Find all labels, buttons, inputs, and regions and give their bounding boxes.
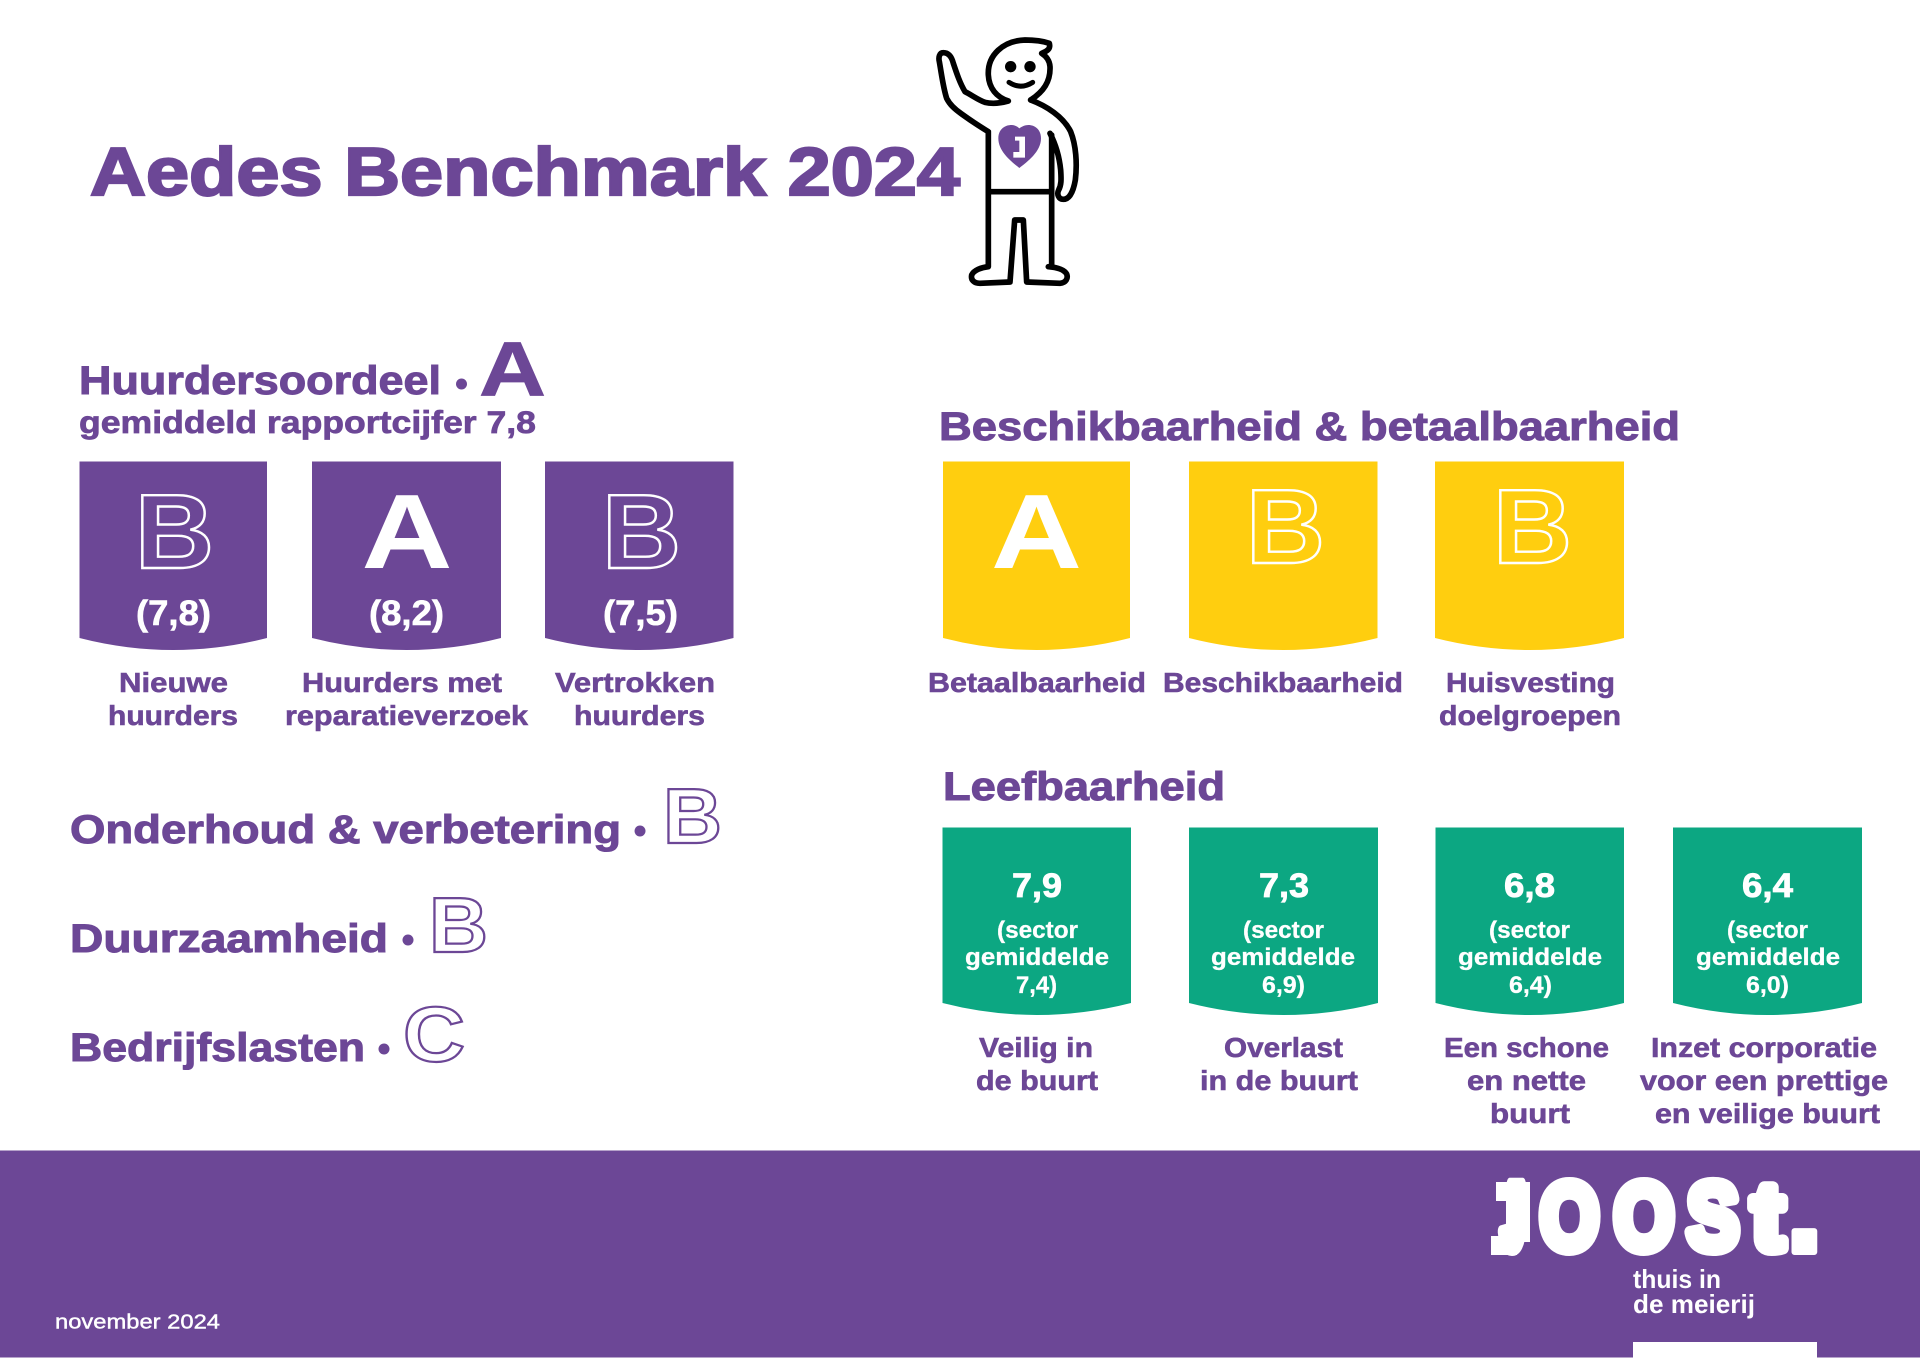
card: Een schone en nette buurt: Een schone bbox=[1444, 1032, 1609, 1063]
card: Beschikbaarheid: B bbox=[1246, 468, 1325, 586]
card: Veilig in de buurt: gemiddelde bbox=[965, 944, 1109, 971]
heading: Huurdersoordeel: A bbox=[479, 326, 546, 412]
card: Veilig in de buurt: 7,4) bbox=[1016, 972, 1057, 999]
card: Nieuwe huurders: Nieuwe bbox=[119, 667, 228, 698]
logo: JOOSt. bbox=[1491, 1125, 1824, 1282]
title: Aedes Benchmark 2024 bbox=[90, 134, 960, 210]
card: Veilig in de buurt bbox=[942, 828, 1131, 1096]
logo: JOOSt.: O bbox=[1540, 1164, 1599, 1270]
card: Nieuwe huurders: huurders bbox=[108, 700, 238, 731]
logo tagline: de meierij bbox=[1633, 1289, 1755, 1319]
card: Een schone en nette buurt: 6,4) bbox=[1509, 972, 1552, 999]
card: Vertrokken huurders: huurders bbox=[574, 700, 705, 731]
card: Veilig in de buurt: de buurt bbox=[976, 1065, 1098, 1096]
card: Veilig in de buurt: 7,9 bbox=[1012, 867, 1062, 905]
heading: Huurdersoordeel: Huurdersoordeel bbox=[79, 359, 441, 403]
card: Een schone en nette buurt: 6,8 bbox=[1504, 867, 1555, 905]
card: Een schone en nette buurt: gemiddelde bbox=[1458, 944, 1602, 971]
logo: JOOSt.: t bbox=[1752, 1164, 1784, 1270]
card: Een schone en nette buurt bbox=[1436, 828, 1624, 1129]
card: Inzet corporatie voor een prettige en veilige buurt: voor een prettige bbox=[1640, 1065, 1888, 1096]
logo: JOOSt.: O bbox=[1614, 1164, 1674, 1270]
card: Overlast in de buurt: gemiddelde bbox=[1211, 944, 1355, 971]
card: Nieuwe huurders: B bbox=[135, 473, 214, 591]
card: Inzet corporatie voor een prettige en veilige buurt: (sector bbox=[1727, 917, 1808, 944]
logo: JOOSt.: J bbox=[1500, 1164, 1526, 1270]
heading: Bedrijfslasten: Bedrijfslasten bbox=[70, 1026, 365, 1070]
card: Betaalbaarheid: A bbox=[991, 473, 1082, 591]
card: Inzet corporatie voor een prettige en veilige buurt: en veilige buurt bbox=[1655, 1098, 1880, 1129]
card: Vertrokken huurders: Vertrokken bbox=[555, 667, 715, 698]
card: Huisvesting doelgroepen: B bbox=[1493, 468, 1572, 586]
card: Inzet corporatie voor een prettige en veilige buurt: gemiddelde bbox=[1696, 944, 1840, 971]
card: Huurders met reparatieverzoek: Huurders met bbox=[302, 667, 502, 698]
logo tagline: thuis in bbox=[1633, 1264, 1721, 1294]
card: Huurders met reparatieverzoek: (8,2) bbox=[369, 594, 444, 633]
card: Beschikbaarheid bbox=[1163, 462, 1403, 698]
heading: Onderhoud & verbetering bbox=[70, 772, 722, 860]
card: Een schone en nette buurt: buurt bbox=[1490, 1098, 1570, 1129]
card: Een schone en nette buurt: (sector bbox=[1489, 917, 1570, 944]
card: Betaalbaarheid bbox=[928, 462, 1146, 698]
heading: Onderhoud & verbetering: Onderhoud & verbetering bbox=[70, 808, 621, 852]
card: Overlast in de buurt: Overlast bbox=[1224, 1032, 1343, 1063]
card: Huurders met reparatieverzoek: reparatieverzoek bbox=[285, 700, 528, 731]
logo: JOOSt.: S bbox=[1687, 1164, 1739, 1270]
card: Een schone en nette buurt: en nette bbox=[1467, 1065, 1586, 1096]
heading: Bedrijfslasten: C bbox=[403, 990, 465, 1078]
card: Veilig in de buurt: Veilig in bbox=[979, 1032, 1093, 1063]
card: Vertrokken huurders: B bbox=[602, 473, 681, 591]
card: Nieuwe huurders: (7,8) bbox=[136, 594, 211, 633]
card: Betaalbaarheid: Betaalbaarheid bbox=[928, 667, 1146, 698]
card: Inzet corporatie voor een prettige en veilige buurt bbox=[1640, 828, 1888, 1129]
icon: waving mascot bbox=[939, 40, 1076, 283]
card: Huisvesting doelgroepen: Huisvesting bbox=[1446, 667, 1615, 698]
card: Vertrokken huurders bbox=[545, 462, 734, 731]
footer band bbox=[0, 1150, 1920, 1358]
heading: Duurzaamheid: Duurzaamheid bbox=[70, 917, 388, 961]
footer date: november 2024 bbox=[55, 1312, 220, 1334]
logo: JOOSt.: . bbox=[1785, 1125, 1824, 1282]
card: Inzet corporatie voor een prettige en veilige buurt: Inzet corporatie bbox=[1651, 1032, 1877, 1063]
card: Overlast in de buurt: 7,3 bbox=[1259, 867, 1309, 905]
heading: Leefbaarheid: Leefbaarheid bbox=[943, 765, 1225, 809]
card: Nieuwe huurders bbox=[80, 462, 267, 731]
card: Overlast in de buurt bbox=[1189, 828, 1378, 1096]
heading: Huurdersoordeel bbox=[79, 326, 546, 412]
subheading: gemiddeld rapportcijfer: gemiddeld rapportcijfer 7,8 bbox=[79, 404, 536, 440]
card: Huisvesting doelgroepen: doelgroepen bbox=[1439, 700, 1621, 731]
logo tagline bbox=[1633, 1264, 1755, 1319]
card: Inzet corporatie voor een prettige en veilige buurt: 6,4 bbox=[1742, 867, 1793, 905]
card: Overlast in de buurt: in de buurt bbox=[1200, 1065, 1358, 1096]
heading: Duurzaamheid bbox=[70, 881, 488, 969]
heading: Duurzaamheid: B bbox=[429, 881, 488, 969]
heading: Onderhoud & verbetering: B bbox=[663, 772, 722, 860]
card: Beschikbaarheid: Beschikbaarheid bbox=[1163, 667, 1403, 698]
card: Vertrokken huurders: (7,5) bbox=[603, 594, 678, 633]
card: Veilig in de buurt: (sector bbox=[997, 917, 1078, 944]
icon: heart with J bbox=[998, 125, 1041, 168]
card: Overlast in de buurt: (sector bbox=[1243, 917, 1324, 944]
card: Huurders met reparatieverzoek: A bbox=[362, 473, 452, 591]
heading: Bedrijfslasten bbox=[70, 990, 465, 1078]
heading: Beschikbaarheid & betaalbaarheid: Beschikbaarheid & betaalbaarheid bbox=[939, 405, 1680, 449]
card: Overlast in de buurt: 6,9) bbox=[1262, 972, 1305, 999]
card: Huurders met reparatieverzoek bbox=[285, 462, 528, 731]
card: Huisvesting doelgroepen bbox=[1435, 462, 1624, 731]
card: Inzet corporatie voor een prettige en veilige buurt: 6,0) bbox=[1746, 972, 1789, 999]
